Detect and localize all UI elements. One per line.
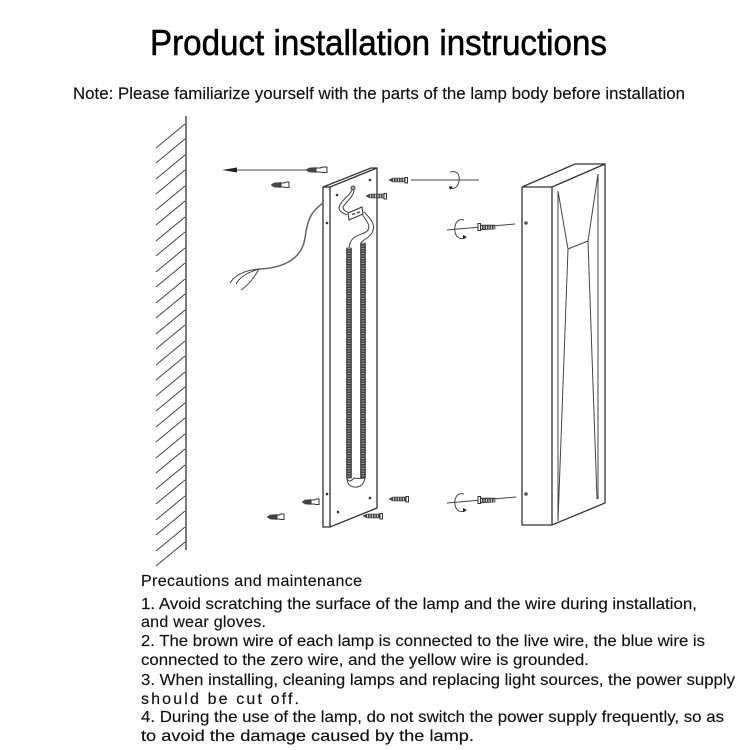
plate screw top right with rotation [389, 172, 479, 190]
power cable [230, 203, 323, 290]
precaution 4 [141, 709, 724, 745]
precautions text [141, 573, 735, 745]
precaution 1: 1. Avoid scratching the surface of the lamp and the wire during installation, [141, 596, 697, 613]
wall anchor lower right [302, 499, 319, 504]
mounting plate [323, 168, 377, 527]
wall with hatching [156, 116, 186, 566]
lamp screw lower with rotation [447, 494, 516, 512]
plate screw bottom left [363, 514, 382, 519]
arrow toward wall with anchor [222, 167, 327, 172]
precaution 3: should be cut off. [141, 691, 299, 708]
precaution 1: and wear gloves. [141, 614, 266, 631]
title: Product installation instructions [150, 22, 607, 63]
wall anchor lower left [267, 514, 284, 520]
lamp housing [522, 164, 605, 525]
plate screw bottom right [389, 496, 408, 502]
precaution 4: 4. During the use of the lamp, do not switch the power supply frequently, so as [141, 709, 724, 726]
wall anchor upper [271, 182, 289, 188]
lamp screw upper with rotation [447, 220, 515, 239]
plate screw top left [366, 194, 386, 199]
wiring and connector [339, 186, 374, 248]
installation note: Note: Please familiarize yourself with the parts of the lamp body before installation [73, 84, 685, 103]
precaution 2: connected to the zero wire, and the yellow wire is grounded. [141, 652, 589, 669]
precaution 1 [141, 596, 697, 631]
precaution 2 [141, 633, 705, 669]
precaution 3 [141, 672, 735, 708]
precaution 3: 3. When installing, cleaning lamps and replacing light sources, the power supply [141, 672, 735, 689]
LED strips [346, 243, 366, 487]
precaution 4: to avoid the damage caused by the lamp. [141, 728, 474, 745]
precautions heading: Precautions and maintenance [141, 573, 362, 590]
precaution 2: 2. The brown wire of each lamp is connected to the live wire, the blue wire is [141, 633, 705, 650]
